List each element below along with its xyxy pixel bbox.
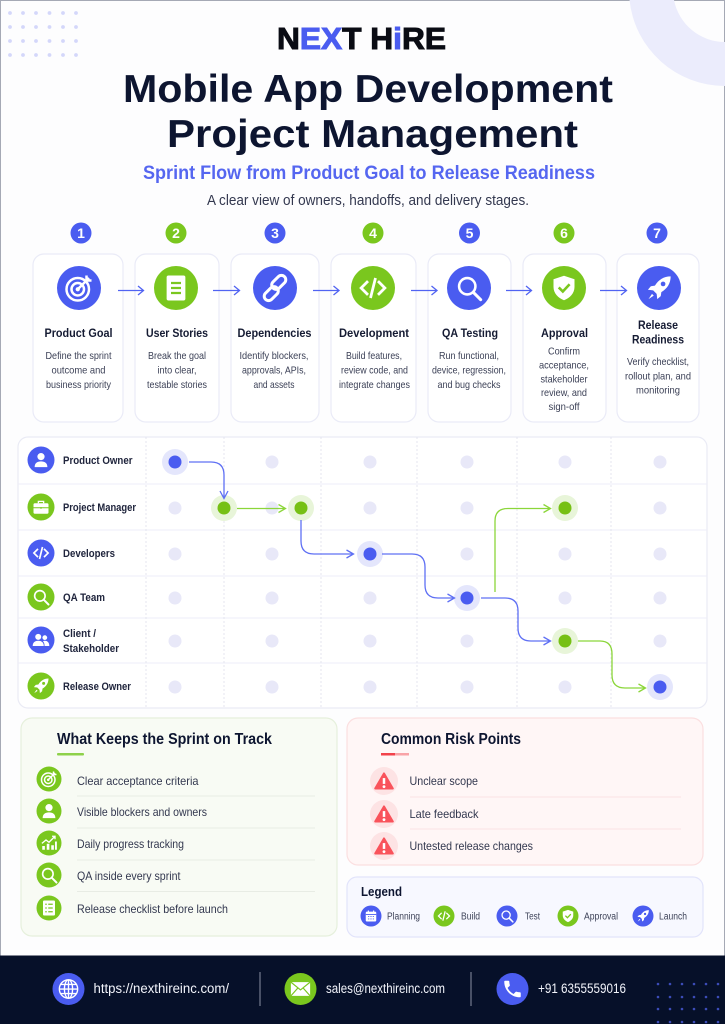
legend: Test <box>496 906 540 926</box>
contact: email <box>284 973 445 1005</box>
item: Release checklist before launch: Release checklist before launch <box>77 902 228 916</box>
blue handoff arrows <box>189 462 550 645</box>
step 2: User Stories <box>135 222 219 422</box>
step 5: QA Testing: Run functional, <box>439 351 499 362</box>
step 1: Product Goal <box>33 222 123 422</box>
step 2: User Stories: into clear, <box>158 366 196 376</box>
risk: Late feedback: Late feedback <box>410 807 479 821</box>
step 4: Development: 4 <box>369 225 377 241</box>
step 5: QA Testing: device, regression, <box>432 366 506 376</box>
legend: Planning: Planning <box>387 912 420 922</box>
step 1: Product Goal: Product Goal <box>44 326 112 340</box>
step 3: Dependencies: 3 <box>271 225 279 241</box>
risk: Unclear scope: Unclear scope <box>410 774 478 788</box>
risk heading: Common Risk Points <box>381 731 521 748</box>
step 7: Release Readiness <box>617 222 699 422</box>
step 1: Product Goal: 1 <box>77 225 85 241</box>
role: Release Owner <box>28 672 131 700</box>
item: Visible blockers and owners: Visible blockers and owners <box>77 805 207 819</box>
step 2: User Stories: Break the goal <box>148 351 206 362</box>
contact: email: sales@nexthireinc.com <box>326 981 445 996</box>
step 7: Release Readiness: monitoring <box>636 386 680 396</box>
step 1: Product Goal: outcome and <box>52 366 106 376</box>
role: Developers: Developers <box>63 548 115 560</box>
step 6: Approval: stakeholder <box>540 374 588 386</box>
item: Visible blockers and owners <box>36 798 207 824</box>
contact: phone <box>496 973 626 1005</box>
role: Project Manager <box>28 494 136 520</box>
step 7: Release Readiness: 7 <box>653 225 661 241</box>
role: Client / Stakeholder <box>28 626 119 655</box>
title: Mobile App Development <box>123 68 613 111</box>
legend: Test: Test <box>525 912 540 922</box>
step arrows <box>118 286 626 295</box>
step 1: Product Goal: Define the sprint <box>46 351 112 362</box>
step 6: Approval: review, and <box>541 388 587 399</box>
step 5: QA Testing <box>428 222 511 422</box>
item: Clear acceptance criteria: Clear acceptance criteria <box>77 774 199 788</box>
role: QA Team: QA Team <box>63 592 105 604</box>
item: Release checklist before launch <box>36 896 228 920</box>
active nodes <box>162 449 673 700</box>
tagline: A clear view of owners, handoffs, and delivery stages. <box>207 193 529 209</box>
panel heading: What Keeps the Sprint on Track <box>57 731 272 748</box>
panel: What Keeps the Sprint on Track <box>21 718 337 936</box>
step 7: Release Readiness: Readiness <box>632 332 684 346</box>
role: Developers <box>28 540 115 566</box>
item: Daily progress tracking: Daily progress tracking <box>77 837 184 851</box>
legend: Approval: Approval <box>584 912 618 922</box>
step 7: Release Readiness: Verify checklist, <box>627 357 689 368</box>
risk: Late feedback <box>370 800 479 828</box>
decorative dots top left <box>8 11 78 57</box>
role: Product Owner: Product Owner <box>63 455 132 467</box>
green handoff arrows <box>237 504 646 692</box>
role: QA Team <box>28 584 105 610</box>
contact: website <box>52 973 229 1005</box>
item: Clear acceptance criteria <box>36 766 199 792</box>
step 1: Product Goal: business priority <box>46 380 112 391</box>
step 3: Dependencies: and assets <box>254 380 294 391</box>
step 3: Dependencies: Dependencies <box>238 326 312 340</box>
step 6: Approval: Approval <box>541 326 588 340</box>
role: Client / Stakeholder: Client / <box>63 628 96 640</box>
role: Project Manager: Project Manager <box>63 502 136 514</box>
role: Product Owner <box>28 446 132 474</box>
role: Release Owner: Release Owner <box>63 681 131 693</box>
step 5: QA Testing: 5 <box>466 225 474 241</box>
logo: Next Hire: NEXT HiRE <box>277 21 446 56</box>
step 6: Approval: Confirm <box>548 346 580 358</box>
step 3: Dependencies: Identify blockers, <box>240 351 308 362</box>
decorative ring top right <box>630 0 725 86</box>
contact: website: https://nexthireinc.com/ <box>94 981 229 996</box>
step 6: Approval: sign-off <box>548 402 580 413</box>
role: Client / Stakeholder: Stakeholder <box>63 643 119 655</box>
panel: legend: Legend <box>361 884 402 899</box>
contact: phone: +91 6355559016 <box>538 981 626 996</box>
risk: Untested release changes: Untested release changes <box>410 839 533 853</box>
step 4: Development: review code, and <box>341 366 408 376</box>
step 7: Release Readiness: rollout plan, and <box>625 372 691 382</box>
title <box>123 68 613 156</box>
step 4: Development: Build features, <box>346 351 402 362</box>
footer <box>0 956 725 1024</box>
step 6: Approval: acceptance, <box>539 360 589 372</box>
legend: Launch: Launch <box>659 912 687 922</box>
step 3: Dependencies: approvals, APIs, <box>242 366 306 376</box>
step 2: User Stories: User Stories <box>146 326 208 340</box>
item: QA inside every sprint <box>36 862 181 888</box>
step 6: Approval: 6 <box>560 225 568 241</box>
panel: legend <box>347 877 703 937</box>
step 5: QA Testing: QA Testing <box>442 326 498 340</box>
step 4: Development <box>331 222 416 422</box>
step 5: QA Testing: and bug checks <box>438 380 500 391</box>
step 2: User Stories: 2 <box>172 225 180 241</box>
inactive grid dots <box>168 456 666 694</box>
legend: Approval <box>558 906 618 926</box>
item: Daily progress tracking <box>36 830 184 856</box>
title: Project Management <box>167 113 578 156</box>
legend: Launch <box>632 906 687 926</box>
legend: Build: Build <box>461 912 480 922</box>
risk: Untested release changes <box>370 832 533 860</box>
swimlane matrix <box>18 437 707 708</box>
step 2: User Stories: testable stories <box>147 380 207 391</box>
step 3: Dependencies <box>231 222 319 422</box>
subtitle: Sprint Flow from Product Goal to Release Readiness <box>143 162 595 184</box>
panel: Common Risk Points <box>347 718 703 865</box>
item: QA inside every sprint: QA inside every sprint <box>77 869 181 883</box>
step 4: Development: integrate changes <box>339 380 410 391</box>
step 4: Development: Development <box>339 326 409 340</box>
legend: Build <box>434 906 480 926</box>
step 7: Release Readiness: Release <box>638 318 678 332</box>
risk: Unclear scope <box>370 767 478 795</box>
step 6: Approval <box>523 222 606 422</box>
legend: Planning <box>360 906 420 926</box>
